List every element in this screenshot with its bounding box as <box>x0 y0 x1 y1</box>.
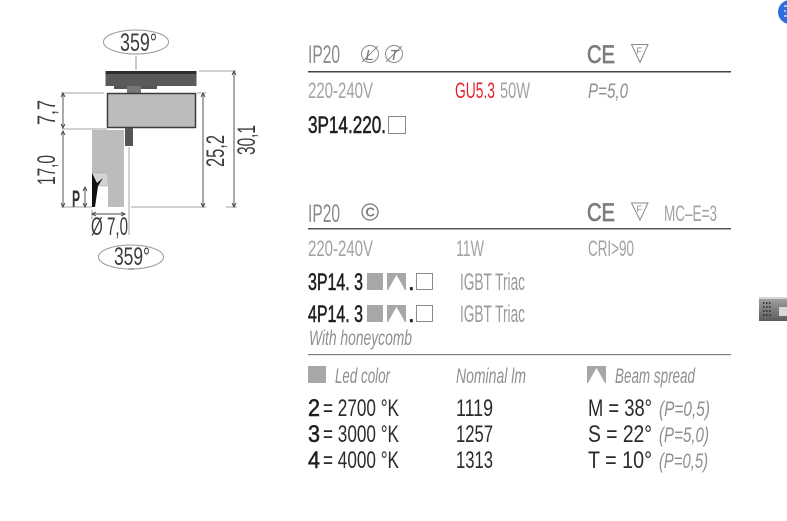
technical drawing of track light: P <box>72 186 80 213</box>
icon: F triangle <box>632 203 648 220</box>
legend: nominal lumens column: 1119 <box>456 395 493 422</box>
CE mark: CE <box>587 199 615 227</box>
dimension 7,7: 7,7 <box>33 100 61 125</box>
legend: led color column <box>308 365 399 474</box>
product code 4P14.3: IGBT Triac <box>460 301 525 328</box>
legend: beam spread column: (P=5,0) <box>659 424 709 447</box>
legend: beam spread column: (P=0,5) <box>659 450 708 473</box>
section 2 specs: CRI>90 <box>588 236 634 261</box>
legend: led color column: 4 <box>308 447 320 474</box>
dimension 25,2: 25,2 <box>202 135 230 167</box>
legend: beam spread column: S = 22° <box>588 421 652 448</box>
product code 3P14.220: 3P14.220. <box>308 112 386 139</box>
legend: beam spread column: M = 38° <box>588 395 652 422</box>
section 2 specs: 11W <box>456 236 484 261</box>
product code 3P14.3: IGBT Triac <box>460 269 525 296</box>
section 2 header <box>308 199 731 230</box>
section 2 header: MC–E=3 <box>664 201 717 226</box>
legend: led color column: Led color <box>335 365 391 388</box>
icon: F triangle <box>632 44 648 62</box>
legend: nominal lumens column: 1257 <box>456 421 493 448</box>
technical drawing of track light <box>33 29 261 271</box>
icon: L and T ratings: L <box>366 47 374 64</box>
product code 4P14.3 <box>308 301 525 328</box>
product code 3P14.3: . <box>408 269 415 296</box>
section 1 specs: 50W <box>500 78 530 103</box>
CE mark: CE <box>587 41 615 69</box>
product code 3P14.3: 3P14. 3 <box>308 269 363 296</box>
legend: led color column: = 4000 °K <box>323 447 399 474</box>
legend: nominal lumens column <box>456 365 526 474</box>
keyboard widget at right edge <box>759 297 787 321</box>
legend: led color column: 2 <box>308 395 320 422</box>
section 1 specs <box>308 78 628 103</box>
section 2 specs: 220-240V <box>308 236 373 261</box>
section 1 specs: 220-240V <box>308 78 373 103</box>
dimension lines <box>61 71 237 235</box>
legend: led color column: 3 <box>308 421 320 448</box>
bottom rotation label 359 degrees: 359° <box>114 243 150 271</box>
section 2 header: IP20 <box>308 200 340 228</box>
icon: copyright C in circle <box>362 204 378 220</box>
product code 4P14.3: . <box>408 301 415 328</box>
legend: led color column: = 2700 °K <box>323 395 399 422</box>
icon: copyright C in circle: C <box>366 204 376 220</box>
icon: F triangle: F <box>636 46 642 56</box>
light body <box>92 94 196 207</box>
icon: F triangle: F <box>636 204 642 214</box>
dimension diameter 7,0: Ø 7,0 <box>91 213 128 241</box>
track adapter <box>106 71 196 94</box>
product code 3P14.3 <box>308 269 525 296</box>
section 1 header: IP20 <box>308 41 340 69</box>
legend: beam spread column: (P=0,5) <box>659 398 710 421</box>
dimension 17,0: 17,0 <box>33 155 61 185</box>
note: with honeycomb: With honeycomb <box>309 327 412 350</box>
top rotation label 359 degrees: 359° <box>120 29 157 57</box>
blue circular widget at top right <box>778 0 787 24</box>
section 1 specs: P=5,0 <box>588 80 628 103</box>
section 1 header <box>308 41 731 72</box>
legend: beam spread column <box>587 365 710 474</box>
legend: beam spread column: T = 10° <box>588 447 652 474</box>
legend: nominal lumens column: Nominal lm <box>456 365 526 388</box>
legend: led color column: = 3000 °K <box>323 421 399 448</box>
icon: L and T ratings <box>362 46 402 64</box>
icon: L and T ratings: T <box>390 47 400 64</box>
section 1 specs: GU5.3 <box>455 78 495 103</box>
product code 4P14.3: 4P14. 3 <box>308 301 363 328</box>
legend: beam spread column: Beam spread <box>615 365 696 388</box>
top rotation label 359 degrees <box>104 29 168 70</box>
legend: nominal lumens column: 1313 <box>456 447 493 474</box>
section 2 specs <box>308 236 634 261</box>
dimension 30,1: 30,1 <box>233 125 261 155</box>
